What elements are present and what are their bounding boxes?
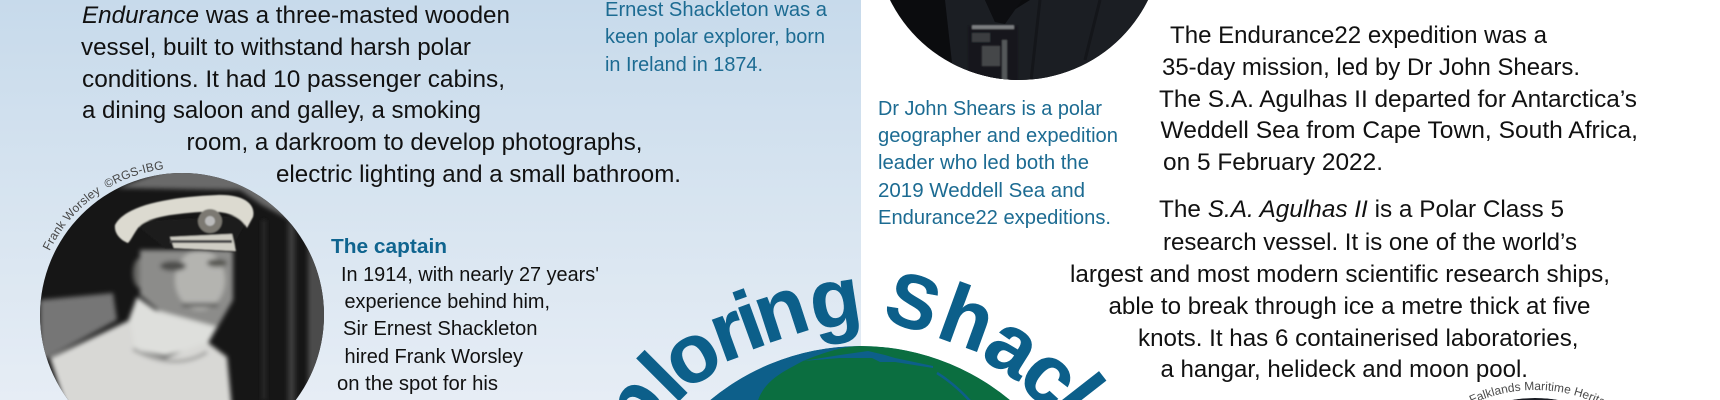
text block: Endurance description: Endurance was a three-masted wooden: [82, 2, 510, 29]
body: captain text: experience behind him,: [344, 290, 550, 313]
caption: Dr John Shears: [878, 97, 1118, 229]
text block: Endurance description: conditions. It had 10 passenger cabins,: [82, 66, 505, 93]
text block: Endurance description: electric lighting and a small bathroom.: [276, 161, 681, 188]
caption: Ernest Shackleton: [605, 0, 828, 76]
text block: S.A. Agulhas II: research vessel. It is one of the world’s: [1163, 229, 1577, 256]
photo: Dr John Shears portrait: [890, 0, 1148, 80]
text block: Endurance description: vessel, built to withstand harsh polar: [81, 34, 471, 61]
text block: Endurance22 expedition: [1159, 22, 1638, 176]
text block: Endurance22 expedition: The S.A. Agulhas II departed for Antarctica’s: [1159, 86, 1637, 113]
text block: S.A. Agulhas II: [1070, 196, 1610, 383]
body: captain text: hired Frank Worsley: [344, 345, 524, 368]
photo: Frank Worsley portrait: [40, 168, 330, 400]
heading: The captain: The captain: [331, 236, 447, 258]
background: left blue panel: [0, 0, 861, 400]
text block: Endurance22 expedition: The Endurance22 expedition was a: [1170, 22, 1547, 49]
text block: Endurance description: [81, 2, 681, 188]
photo credit: Frank Worsley RGS-IBG: Frank Worsley ©RGS-IBG: [42, 161, 163, 250]
body: captain text: Sir Ernest Shackleton: [343, 317, 538, 340]
caption: Dr John Shears: geographer and expedition: [878, 124, 1118, 147]
caption: Dr John Shears: Endurance22 expeditions.: [878, 206, 1111, 229]
text block: S.A. Agulhas II: largest and most modern scientific research ships,: [1070, 261, 1610, 288]
text block: Endurance22 expedition: 35-day mission, led by Dr John Shears.: [1162, 54, 1580, 81]
logo: Falklands Maritime Heritage: [1469, 382, 1604, 400]
text block: The captain: [331, 236, 599, 395]
text block: S.A. Agulhas II: knots. It has 6 containerised laboratories,: [1138, 325, 1578, 352]
body: captain text: [337, 263, 599, 395]
body: captain text: In 1914, with nearly 27 years': [341, 263, 599, 286]
logo photo roundel: [1512, 398, 1558, 400]
text block: S.A. Agulhas II: The S.A. Agulhas II is a Polar Class 5: [1159, 196, 1564, 223]
text block: Endurance description: room, a darkroom to develop photographs,: [186, 129, 642, 156]
text block: Endurance description: a dining saloon and galley, a smoking: [82, 97, 481, 124]
text block: Endurance22 expedition: on 5 February 2022.: [1163, 149, 1383, 176]
caption: Ernest Shackleton: keen polar explorer, born: [605, 25, 825, 48]
caption: Dr John Shears: 2019 Weddell Sea and: [878, 179, 1085, 202]
caption: Dr John Shears: Dr John Shears is a polar: [878, 97, 1102, 120]
body: captain text: on the spot for his: [337, 372, 498, 395]
globe: [710, 346, 1010, 400]
text block: S.A. Agulhas II: a hangar, helideck and moon pool.: [1160, 356, 1528, 383]
text block: S.A. Agulhas II: able to break through ice a metre thick at five: [1108, 293, 1590, 320]
caption: Ernest Shackleton: in Ireland in 1874.: [605, 53, 763, 76]
text block: Endurance22 expedition: Weddell Sea from Cape Town, South Africa,: [1160, 117, 1638, 144]
caption: Dr John Shears: leader who led both the: [878, 151, 1089, 174]
